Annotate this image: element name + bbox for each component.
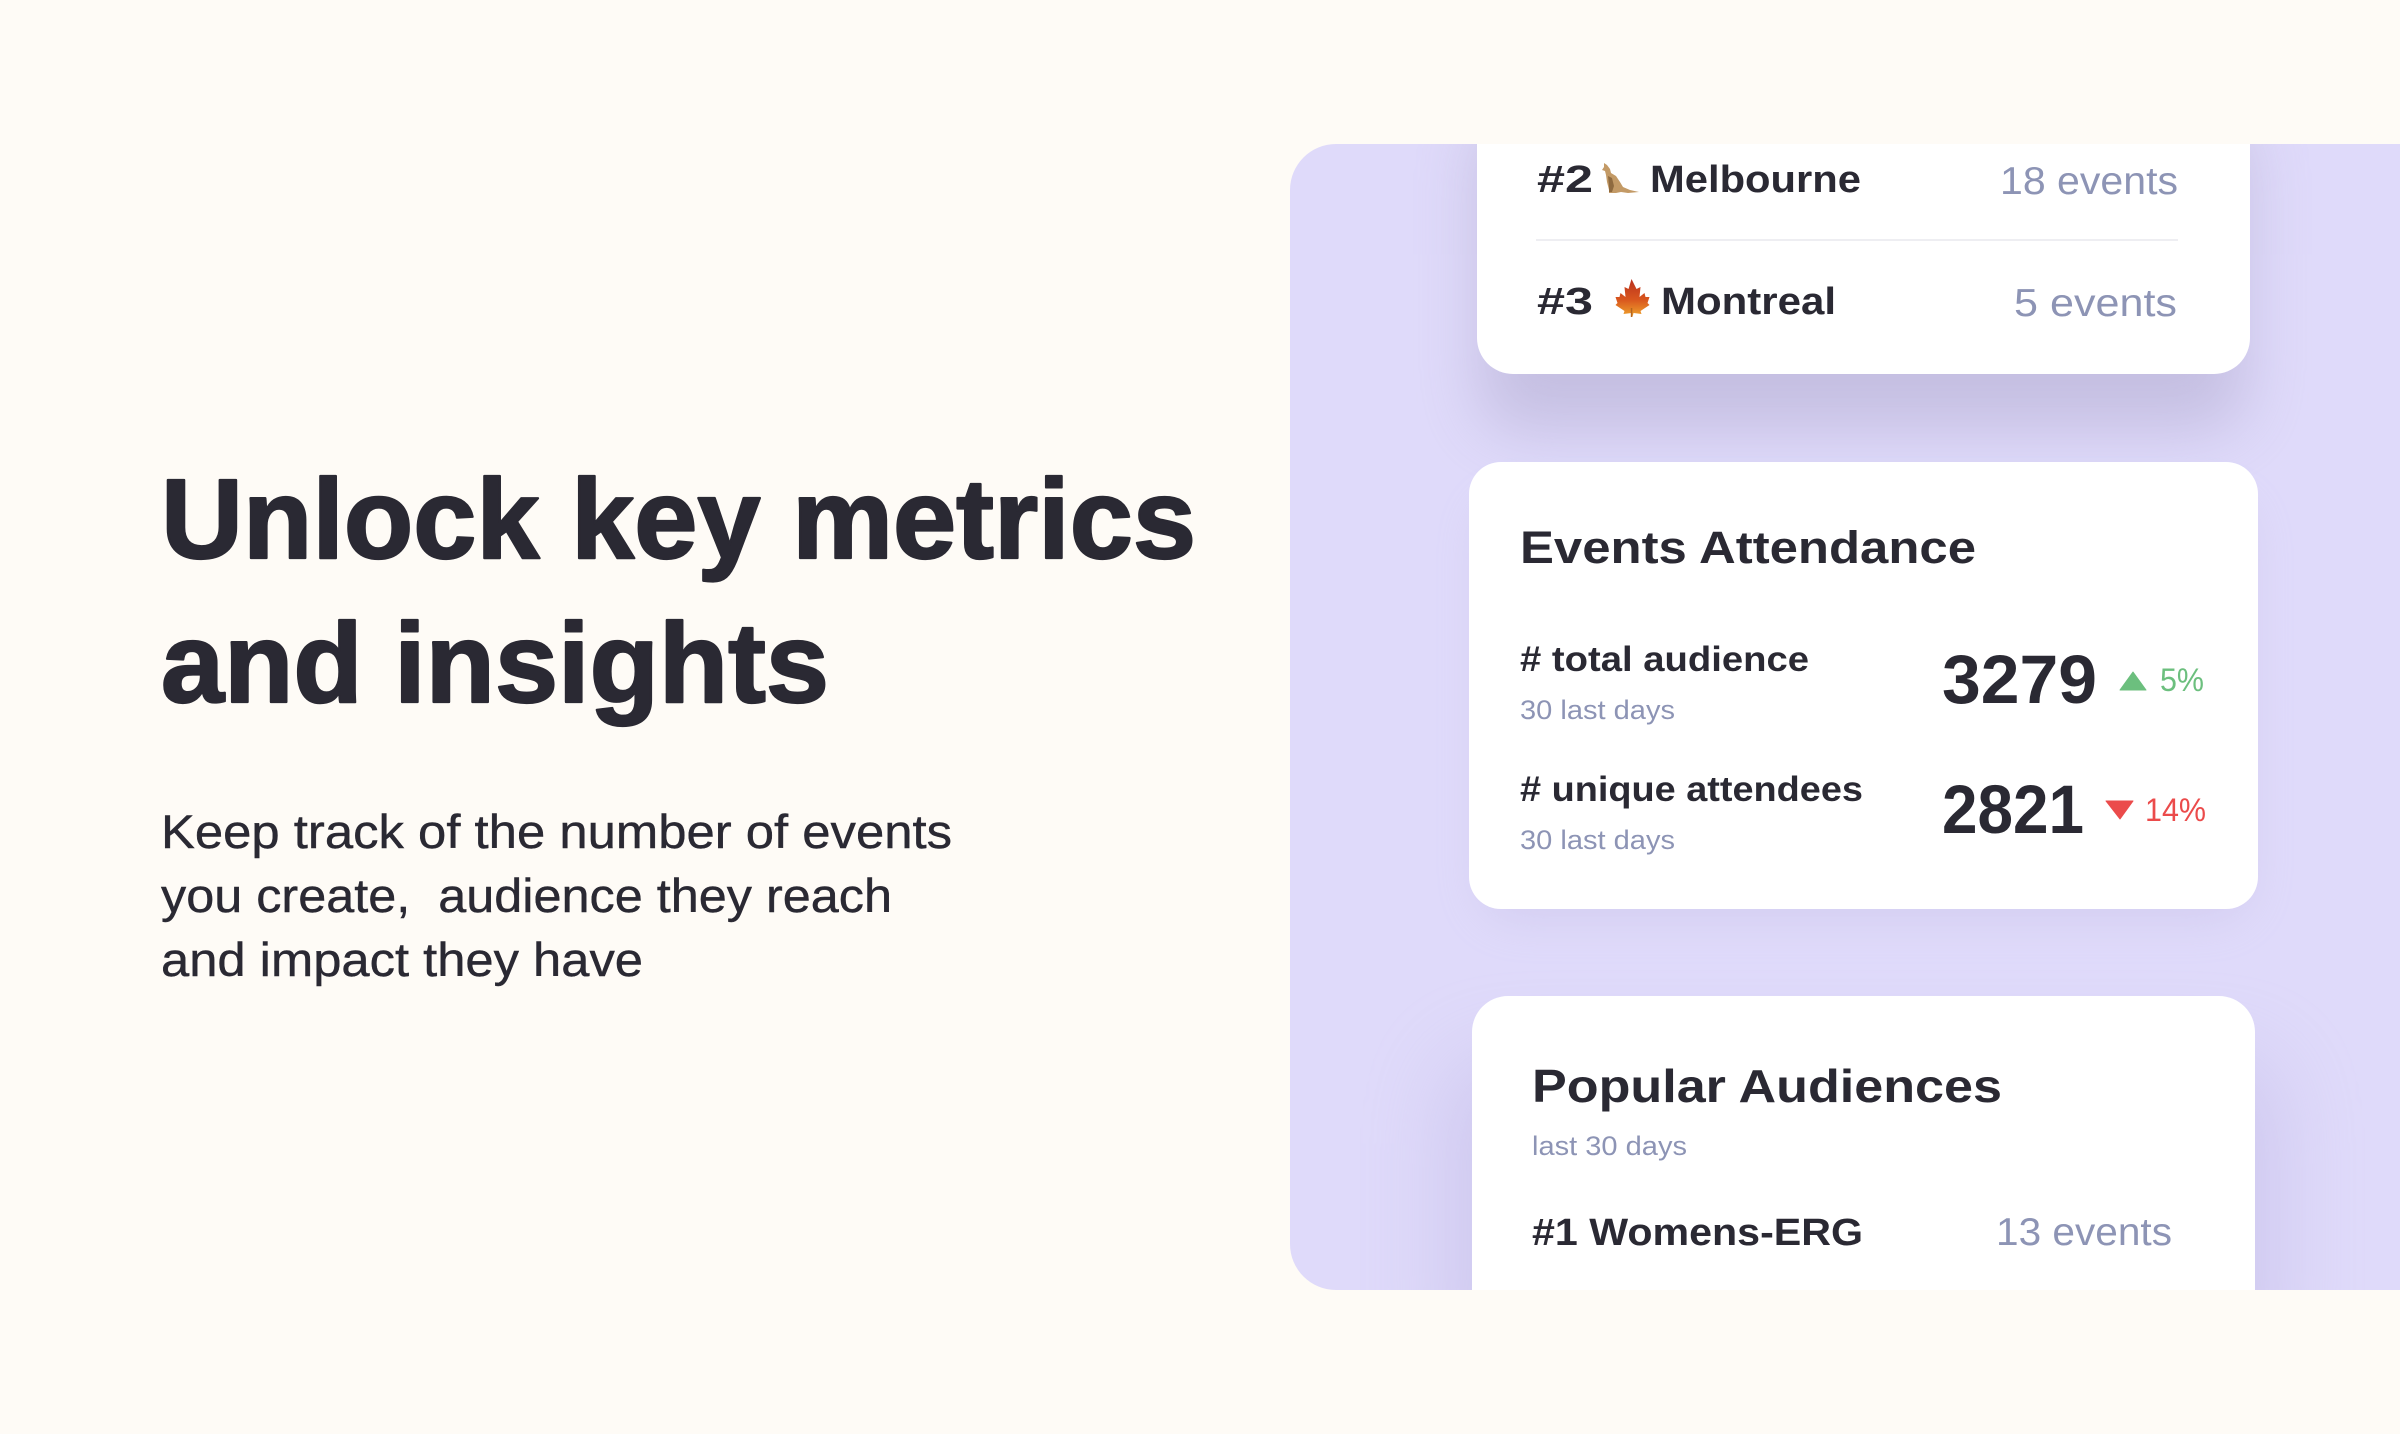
heading: and insights [161,600,829,726]
card: top cities [1477,144,2250,374]
card title: Events Attendance [1520,522,1976,573]
metric: total audience: 5% [2160,662,2204,698]
row: Womens-ERG [1532,1218,2171,1246]
metric: unique attendees: 30 last days [1520,825,1675,855]
row: Montreal: #3 [1537,281,1593,323]
row: Montreal: 5 events [2014,282,2177,325]
row: Melbourne [1538,163,2176,194]
metric: total audience: 30 last days [1520,695,1675,725]
row: Montreal [1538,279,2176,317]
row: Womens-ERG: #1 Womens-ERG [1532,1212,1863,1254]
metric: total audience: 3279 [1942,641,2097,718]
description text [161,805,952,986]
row: Melbourne: #2 [1537,159,1593,201]
metric: unique attendees: 14% [2145,792,2206,828]
row: Montreal: Montreal [1661,281,1836,323]
row: Melbourne: 18 events [2000,160,2178,203]
heading [161,456,1196,726]
card: popular audiences [1472,996,2255,1290]
description text: and impact they have [161,933,643,986]
icon: down arrow [2106,801,2133,819]
icon: kangaroo [1602,163,1639,193]
card subtitle: last 30 days [1532,1131,1687,1161]
metric: unique attendees: 2821 [1942,771,2084,848]
metric: unique attendees: # unique attendees [1520,770,1863,809]
card: events attendance [1469,462,2258,909]
row: Womens-ERG: 13 events [1996,1211,2172,1254]
row: Melbourne: Melbourne [1650,159,1861,201]
metric: total audience: # total audience [1520,640,1809,679]
icon: up arrow [2120,672,2146,690]
heading: Unlock key metrics [161,456,1196,582]
metric: total audience [1520,640,2204,725]
panel: dashboard preview [1290,144,2400,1290]
description text: Keep track of the number of events [161,805,952,858]
card shadows [1450,120,2275,1380]
icon: maple leaf [1616,279,1650,317]
metric: unique attendees [1520,770,2206,855]
card title: Popular Audiences [1532,1060,2002,1112]
panel background [1290,144,2400,1290]
description text: you create, audience they reach [161,869,892,922]
